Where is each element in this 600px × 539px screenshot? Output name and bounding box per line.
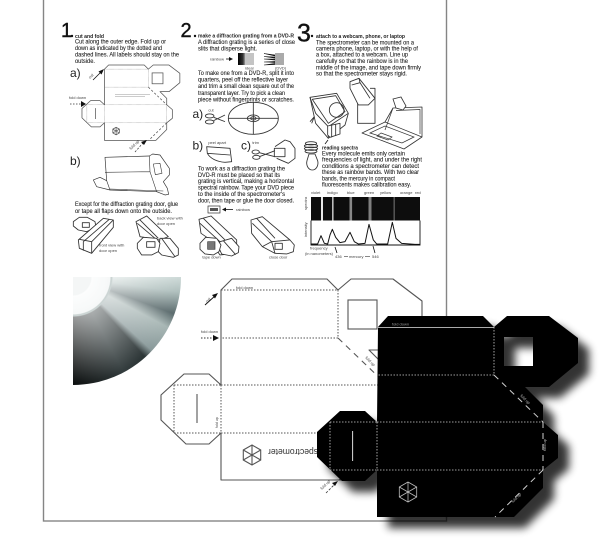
text: reading spectra: conditions a spectrometer can detect: [322, 163, 419, 170]
chart: axis labels: (in nanometers): [305, 251, 334, 256]
chart: axis labels: spectra: [303, 196, 308, 210]
diagram: folded box b: [93, 154, 169, 195]
chart: axis labels: 546: [372, 254, 379, 259]
text: mounting instructions: [316, 40, 422, 78]
label: fold up side: fold up: [364, 355, 377, 368]
chart: spectra bands: [311, 197, 420, 220]
white template net: [161, 279, 422, 493]
text: glue flaps: [75, 201, 178, 215]
black printed net with shadow: [317, 316, 578, 517]
black net fold lines: [330, 327, 543, 517]
diagram: tape down: tape down: [202, 254, 221, 259]
text: DVD-R preparation: piece without fingerprints or scratches.: [198, 96, 294, 104]
text: reading spectra: these as rainbow bands. With two clear: [322, 169, 420, 176]
arrow: webcam pointer: [325, 140, 328, 144]
diagram: laptop with spectrometer: [362, 97, 422, 149]
text: spectrometer upside down: spectrometer: [268, 447, 318, 457]
diagram: rainbow ideal versus DVD: rainbow: [210, 56, 224, 62]
arrow: fold down: fold down: [69, 95, 86, 100]
step 2 panel: [180, 20, 295, 259]
step 1 panel: [61, 20, 183, 257]
label: front view: door open: [99, 248, 117, 253]
chart: colour labels: yellow: [380, 190, 391, 195]
text: reading spectra: frequencies of light, and under the right: [322, 156, 422, 164]
text: grating placement: to the inside of the spectrometer's: [198, 191, 285, 198]
arrow: fold up: [128, 138, 147, 152]
label: back view: back view with: [157, 216, 183, 220]
diagram: front view with door open: [73, 217, 113, 253]
text: glue flaps: or tape all flaps down onto the outside.: [75, 208, 172, 215]
text: grating definition: A diffraction grating is a series of close: [198, 39, 295, 46]
text: grating placement: door, then tape or glue the door closed.: [198, 198, 294, 204]
text: cut and fold instructions: Cut along the outer edge. Fold up or: [75, 38, 167, 46]
text: DVD-R preparation: transparent layer. Try to pick a clean: [198, 90, 285, 97]
text: cut and fold instructions: down as indicated by the dotted and: [75, 45, 162, 52]
text: mounting instructions: The spectrometer can be mounted on a: [316, 40, 414, 46]
arrow: fold up bottom: fold up: [319, 478, 332, 491]
text: cut and fold instructions: outside.: [75, 58, 95, 65]
diagram: peel apart: peel apart: [208, 140, 227, 145]
arrow: cut: cut: [87, 72, 95, 80]
diagram: trim: trim: [252, 140, 260, 145]
diagram: scissors cutting DVD: [205, 102, 278, 134]
arrow: fold down: [201, 329, 219, 341]
chart: colour labels: violet: [311, 190, 321, 195]
arrow: cut: [87, 69, 104, 80]
diagram: rainbow on door: [208, 206, 250, 213]
chart: axis labels: 436: [335, 254, 342, 259]
text: grating definition: slits that disperse light.: [198, 46, 257, 52]
label: back view: door open: [157, 221, 175, 226]
chart: colour labels: orange: [400, 190, 413, 195]
text: grating placement: spectral rainbow. Tape your DVD piece: [198, 184, 294, 192]
label: front view: front view with: [99, 242, 124, 248]
label: fold up hex: fold up: [215, 417, 219, 428]
text: mounting instructions: camera phone, laptop, or with the help of: [316, 46, 418, 52]
chart: axis labels: [303, 196, 379, 259]
arrow: fold up: fold up: [128, 138, 141, 151]
arrow: fold up bottom: [319, 478, 338, 493]
arrow: cut: [204, 293, 218, 305]
label: fold down top flap: fold down: [236, 285, 253, 290]
page frame: [44, 0, 446, 521]
label b: b): [192, 138, 203, 152]
text: mounting instructions: carefully so that the rainbow is in the: [316, 58, 408, 65]
text: mounting instructions: so that the spectrometer stays rigid.: [316, 70, 407, 78]
labels on black net: fold up: [510, 491, 523, 504]
heading: attach to a webcam: attach to a webcam, phone, or laptop: [316, 34, 406, 40]
chart: axis labels: frequency: [310, 246, 328, 250]
chart: colour labels: red: [415, 190, 421, 195]
label c: c): [241, 138, 251, 152]
diagram: close door: close door: [269, 254, 288, 259]
text: DVD-R preparation: and trim a small clean square out of the: [198, 83, 294, 90]
diagram: flat net a: [82, 65, 180, 140]
diagram: close door: [251, 217, 294, 259]
icon: black net logo: [399, 482, 417, 502]
heading: reading spectra: reading spectra: [322, 146, 359, 152]
text: mounting instructions: a box, attached to a webcam. Line up: [316, 52, 408, 58]
label: front view: [99, 242, 124, 253]
image: quarter DVD disc: [73, 277, 181, 385]
text: DVD-R preparation: To make one from a DVD-R, split it into: [198, 70, 294, 77]
chart: axis labels: intensity: [303, 222, 308, 237]
chart: colour labels: indigo: [327, 190, 338, 195]
diagram: scissors cutting DVD: cut: [208, 107, 215, 112]
text: reading spectra: Every molecule emits only certain: [322, 150, 405, 158]
diagram: box with webcam: [310, 93, 348, 138]
diagram: back view with door open: [136, 216, 178, 257]
labels on black net: [392, 322, 547, 504]
text: grating definition: [198, 39, 295, 52]
chart: intensity curve: [311, 220, 420, 245]
heading: step 2 number: 2: [180, 20, 192, 42]
diagram: rainbow ideal versus DVD: [210, 53, 287, 70]
diagram: tape down: [199, 216, 239, 259]
arrow: fold down: [69, 95, 86, 107]
text: grating placement: To work as a diffraction grating the: [198, 166, 285, 172]
text: mounting instructions: middle of the image, and tape down firmly: [316, 64, 422, 72]
text: reading spectra: [322, 150, 422, 188]
label a: a): [70, 66, 81, 80]
step 3 panel: [297, 20, 422, 259]
diagram: peel apart: [207, 140, 232, 162]
icon: compact fluorescent bulb: [304, 142, 318, 170]
label a: a): [192, 107, 203, 121]
text: cut and fold instructions: dashed lines. All labels should stay on the: [75, 52, 179, 58]
diagram: trim: [252, 140, 295, 163]
labels on black net: fold up: [519, 393, 532, 406]
heading: make a diffraction grating: make a diffraction grating from a DVD-R: [198, 34, 294, 40]
text: reading spectra: bands, the mercury in compact: [322, 176, 395, 182]
text: cut and fold instructions: [75, 38, 179, 65]
chart: colour labels: [311, 190, 421, 195]
text: DVD-R preparation: quarters, peel off the reflective layer: [198, 76, 289, 84]
label: back view: [157, 216, 183, 226]
chart: colour labels: green: [364, 190, 374, 195]
text: reading spectra: fluorescents makes calibration easy.: [322, 182, 411, 188]
labels on black net: fold up: [542, 438, 547, 451]
diagram: rainbow on door: rainbow: [236, 207, 250, 212]
labels on black net: fold down: [392, 322, 409, 326]
text: grating placement: DVD-R must be placed so that its: [198, 172, 280, 179]
text: grating placement: [198, 166, 294, 204]
arrow: fold down: fold down: [201, 329, 218, 334]
diagram: rainbow ideal versus DVD: (DVD): [275, 66, 287, 70]
diagram: phone with spectrometer: [350, 78, 375, 123]
diagram: rainbow ideal versus DVD: ideal: [245, 66, 254, 70]
heading: cut and fold: cut and fold: [75, 34, 105, 40]
chart: axis labels: mercury: [349, 254, 363, 259]
text: grating placement: grating is vertical, making a horizontal: [198, 178, 294, 185]
text: DVD-R preparation: [198, 70, 294, 104]
label b: b): [70, 154, 81, 168]
heading: step 1 number: 1: [61, 20, 72, 42]
arrow: cut: cut: [204, 296, 212, 304]
heading: step 3 number: 3: [297, 20, 311, 48]
chart: colour labels: blue: [347, 190, 355, 195]
text: glue flaps: Except for the diffraction grating door, glue: [75, 201, 178, 208]
